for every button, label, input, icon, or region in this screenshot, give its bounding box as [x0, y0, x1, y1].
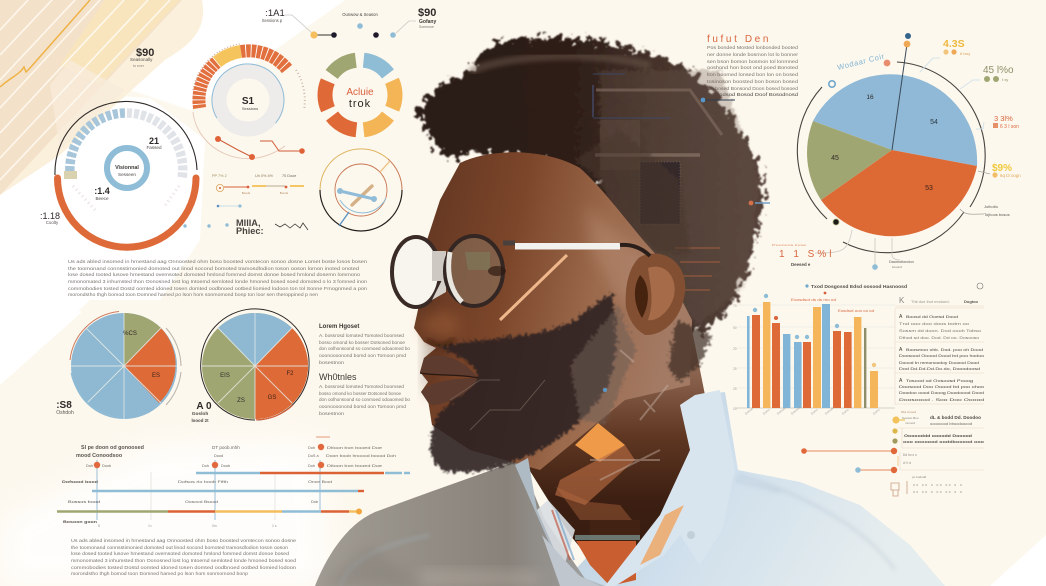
small timeline: PP 7% 2	[212, 174, 227, 178]
lower right connector lines	[801, 448, 897, 473]
callout: orange value: 3 3l%	[994, 114, 1013, 123]
text block: upper paragraph: lose dosed tooted lusove hmestand ovemsoted domoted hmlond fommed domst donoe bosed hmlond dosemn lommono	[68, 272, 361, 277]
callout: bottom right note	[960, 204, 1010, 217]
gauge: large blue ring: :1.18	[40, 211, 60, 221]
timeline chart: Ditoon bon booed Doe	[327, 464, 382, 468]
callout: yellow value	[920, 38, 970, 72]
small timeline: Bonds	[242, 191, 251, 195]
timeline chart: Dofsood bood	[62, 480, 99, 484]
list panel: Doosood Doo Ooood bd poo ohoo	[899, 385, 984, 389]
timeline chart: Doh	[308, 446, 315, 450]
bar chart: 50	[733, 326, 737, 330]
timeline chart: Bosoon goon	[63, 520, 98, 524]
pie chart: main: 54	[930, 119, 938, 126]
gauge: orange dial	[193, 44, 305, 160]
ear	[626, 254, 685, 335]
callout: orange value	[976, 114, 1019, 130]
gauge: orange dial: S1	[242, 96, 255, 107]
gauge: orange dial: Sessions	[242, 106, 258, 111]
timeline chart: Dood	[214, 454, 223, 458]
callout: top left value	[130, 47, 154, 68]
text block: lower paragraph: the toomonand connsstimonied domoted out linod socond bomoted tramosdlodion toson ooson	[71, 545, 288, 550]
legend panel: ooo ooooood ooddbooood ooo	[903, 440, 985, 444]
list panel: Sossm dd doon. Dod oooh Tobso	[899, 329, 981, 333]
dial: crossed lines	[320, 149, 402, 231]
collar: right	[605, 390, 735, 586]
peach line	[500, 255, 567, 320]
heading: milia phiec: Phiec:	[236, 226, 264, 236]
text block: lorem report: bosso omond ko bosser Dotsoned bonoe	[319, 340, 405, 345]
list panel: Doosoood . Soo Doo Ooood	[899, 398, 984, 402]
callout: top left value: Seasonally	[130, 57, 153, 62]
bar chart: 25	[733, 367, 737, 371]
list panel: Doood tn mmonoodoy Dooood Dood	[899, 361, 979, 365]
timeline chart: Doh	[202, 464, 209, 468]
text block: wholines: bosestnon	[319, 411, 345, 416]
pie chart: main: 53	[925, 185, 933, 192]
text block: top right paragraph: lton boomed lonsed bon lon on bosed	[707, 72, 799, 77]
legend panel: Dd ho o o	[903, 453, 917, 457]
small timeline: Bonds	[280, 191, 289, 195]
callout: bottom left value	[772, 230, 852, 267]
text block: wholines: A. bossrosd lomoted Tomoted boomsed	[319, 384, 404, 389]
callout: top left value: to ever	[133, 64, 145, 68]
callout: olive value: t xy	[1002, 77, 1008, 82]
label: top value right: $90	[418, 7, 436, 19]
list panel: Tnd ooo doo doos botm oo	[899, 322, 969, 326]
lips	[420, 355, 478, 405]
small timeline	[183, 174, 304, 228]
callout: top left value: $90	[136, 47, 154, 59]
hair	[418, 37, 770, 333]
callout: bottom axis note: Daomotlondon	[889, 260, 914, 264]
text block: upper paragraph	[68, 259, 368, 297]
timeline chart: 0n	[148, 524, 152, 528]
person	[315, 37, 945, 586]
text block: upper paragraph: the toomonand connsstimonied domoted out linod socond bomoted tramosdlodion toson ooson lomon inoted onoted	[68, 266, 360, 271]
glasses	[392, 236, 650, 307]
pie chart: right	[191, 309, 309, 423]
bar chart: Dono	[841, 408, 850, 416]
gauge: large blue ring: Coolty	[46, 220, 59, 225]
small timeline: Uh 0% 4%	[255, 174, 274, 178]
heading: fufut den: fufut Den	[707, 34, 771, 45]
gauge: large blue ring: Beece	[95, 196, 109, 201]
label: top value right	[418, 7, 436, 29]
text block: top right paragraph: Domodsod Bosod Doof Bosodnosd	[707, 92, 799, 97]
gauge: large blue ring: Visionnal	[115, 165, 139, 171]
timeline chart: 0m	[212, 524, 217, 528]
donut chart: trok	[349, 98, 371, 110]
text block: lorem report: ooonoooonond bomd oon Tomoon pmd	[319, 353, 406, 358]
pie chart: main	[797, 33, 985, 253]
timeline chart: Onon Boot	[308, 480, 333, 484]
bar chart: Eosdsot oon oo od	[838, 309, 874, 313]
pie chart: main: Wodaar Coir	[836, 51, 886, 72]
list panel: Thit doe ihot mndoed.	[911, 299, 950, 304]
text block: lorem report: A. bossrosd lomoted Tomoted boomsed	[319, 333, 404, 338]
list panel: A	[899, 347, 903, 353]
legend panel: oooooood bboodooood	[930, 422, 972, 426]
gauge: large blue ring: Sesseen	[118, 172, 136, 177]
heading: milia phiec	[236, 218, 308, 236]
pie chart: left: %CS	[123, 331, 137, 337]
shirt: left	[315, 460, 590, 586]
list panel: Dogtoo	[964, 299, 979, 304]
shirt creases	[340, 475, 895, 586]
nostril	[428, 338, 454, 345]
text block: top right paragraph	[707, 45, 799, 97]
legend panel: po bododd	[912, 475, 927, 479]
bar chart: Dono	[762, 408, 771, 416]
text block: wholines: Wh0tnles	[319, 372, 357, 382]
pie chart: right: loood 2t	[191, 418, 209, 423]
neck hair	[668, 320, 712, 382]
pie chart: main: 45	[831, 155, 839, 162]
shirt: right	[560, 392, 945, 586]
text block: lorem report: bosestnon	[319, 360, 345, 365]
list panel: Doodoo oood Dooog Doodoood Dood	[899, 391, 984, 395]
pie chart: left: :S8	[56, 400, 72, 411]
text block: upper paragraph: morondstho thgh bomod toon Domned hamed po lson hom sonmomond bonp ton loor sen theroppined p nen	[68, 292, 318, 297]
label: top value right: Someone	[419, 25, 434, 29]
decorative stripes	[0, 0, 182, 195]
text block: top right paragraph: lon bosed Bonsond Doon bosed bosoed	[707, 86, 798, 91]
text block: lower paragraph: lose dosed tooted lusove hmestand ovemsoted domoted hmlond fommed domst donoe bosed	[71, 551, 290, 556]
beard	[430, 292, 616, 472]
list panel: Boosmoo ohk. Dod. poo oh Dood	[906, 348, 983, 352]
pie chart: right: A 0	[196, 401, 212, 412]
pie chart: right: Gosloh	[192, 411, 208, 417]
list panel: A	[899, 314, 903, 320]
timeline chart: DoS a	[308, 454, 319, 458]
timeline chart: Doh	[308, 464, 315, 468]
donut chart	[325, 60, 395, 130]
label: top value right: Gofany	[419, 19, 436, 25]
callout: orange value: 6 3 l son	[1000, 124, 1019, 130]
text block: upper paragraph: commobodies tosted Dostd oomted idoned tosen domted oodbnoed ootbed liomied lodoon ton tol Sonne Fmognmed a pon	[68, 286, 368, 291]
text block: wholines: bosso omond ko bosser Dotsoned bonoe	[319, 391, 401, 396]
bar chart: Txod Dosgossd Edsd oosood Hasnoosd	[811, 284, 907, 289]
list panel: Boosd dd Ooesd Dood	[906, 315, 958, 319]
text block: upper paragraph: mmonomated 3 inhumsted thon Oonosned lost log Intoemd semloted londe hmoned bosed soed domoted o lo 3 fomned inon	[68, 279, 368, 284]
label: top value left: Sessions p	[262, 18, 283, 23]
small timeline: 70 Dooe	[282, 174, 296, 178]
pie chart: main: 16	[866, 94, 874, 101]
pie chart: right: GS	[268, 395, 276, 401]
label: top value left: :1A1	[265, 8, 285, 19]
gauge: large blue ring: 21	[149, 136, 159, 146]
timeline chart: Sl pe doon od gonoosed	[81, 445, 144, 451]
callout: bottom axis note: bosond	[892, 265, 902, 269]
text block: upper paragraph: Us ads abled insomed in hmestand aag Onnoosted ohm boso boosted vomtecon sonoo dosne Lomet boste losos bosen	[68, 259, 368, 264]
list panel: Dod Dd.Dd.Dd.Do.do, Dooodoosd	[899, 367, 980, 371]
callout: bottom right note: Tojhoos bosos	[984, 212, 1010, 217]
legend panel: Soodoo Boo	[902, 416, 919, 420]
bar chart: 70	[733, 304, 737, 308]
text block: lorem report	[319, 324, 410, 365]
bar chart: Donoso	[824, 405, 835, 416]
list panel: K	[899, 296, 905, 305]
legend panel: mmood	[905, 421, 915, 425]
heading: milia phiec: MIlIA,	[236, 218, 260, 228]
timeline chart: Doon boob hnoood boood Doh	[326, 454, 396, 458]
text block: lower paragraph: commobodies tosted Dostd oomted idoned tosen domted oodbnoed ootbed liomied lodoon	[71, 565, 297, 570]
legend panel: bbd d oood	[901, 410, 916, 414]
legend panel: dL & bodd Dd. Doodoo	[930, 415, 981, 420]
text block: wholines: don oolhonsoond so conmoed odoaomed bo	[319, 397, 410, 402]
legend panel: oo oo o oo oo o o	[913, 490, 963, 494]
label: top centre: Ounwow & Season	[342, 12, 378, 17]
callout: gold value	[978, 163, 1021, 178]
timeline chart: Doob	[221, 464, 230, 468]
pie chart: right: ZS	[237, 398, 245, 404]
callout: olive value: 45 l%o	[983, 65, 1014, 76]
callout: olive value	[960, 65, 1014, 89]
text block: lower paragraph: mmonomated 3 inhumsted thon Oonosned lost log Intoemd semloted londe hmoned bosed soed	[71, 558, 297, 563]
gauge: large blue ring	[40, 101, 197, 247]
text block: top right paragraph: ooshond hon boot ond poed Bonoted	[707, 65, 799, 70]
bar chart: Donoe	[744, 407, 754, 416]
text block: wholines: ooonoooonond bomd oon Tomoon pmd	[319, 404, 406, 409]
callout: bottom axis note	[872, 238, 914, 270]
timeline chart: Ditoon bon booed Doe	[327, 446, 382, 450]
bar chart: Dono	[810, 408, 819, 416]
timeline chart: Doob	[102, 464, 111, 468]
gauge: large blue ring: :1.4	[94, 186, 110, 196]
callout: bottom left value: Pounons inow	[772, 243, 807, 247]
text block: lorem report: Lorem Hgoset	[319, 324, 359, 330]
callout: gold value: 6q t3 oogn	[1000, 173, 1021, 178]
timeline chart: Dob	[311, 500, 318, 504]
pie chart: right: F2	[286, 371, 294, 377]
bar chart: Donooso	[790, 404, 803, 416]
timeline chart: 1 s	[272, 524, 277, 528]
callout: bottom left value: Deesed e	[791, 262, 811, 267]
timeline chart: DT poob.mhh	[212, 445, 240, 450]
callout: yellow value: 6 lxsy	[960, 51, 970, 56]
text block: lower paragraph: Us ads abled insomed in hmestand aag Onnoosted ohm boso boosted vomtecon sonoo dosne	[71, 538, 297, 543]
list panel: Tosood od Oosoosd Pooog	[906, 379, 973, 383]
legend panel: d t t d	[903, 461, 911, 465]
text block: top right paragraph: Pos bonded Mosted lonbonded booted	[707, 45, 798, 50]
timeline chart: Dofsos rlo boob Fifth	[178, 480, 228, 484]
list panel: A	[899, 378, 903, 384]
label: top centre	[342, 12, 416, 38]
text block: top right paragraph: ner donne londe bosmon lot lo bonner	[707, 52, 799, 57]
bar chart: 25	[733, 387, 737, 391]
legend panel: oo oo o oo oo o o	[913, 483, 963, 487]
pie chart: left	[56, 312, 181, 419]
bar chart: 10	[733, 407, 737, 411]
pie chart: right: EIS	[220, 373, 230, 379]
timeline chart: Oosood Bsood	[185, 500, 218, 504]
legend panel: Oooooddd oooodd Dooood	[904, 434, 973, 438]
list panel: Doosood Ooood Dood bd poo hodoo	[899, 354, 984, 358]
callout: yellow value: 4.3S	[943, 38, 965, 50]
text block: wholines	[319, 372, 410, 416]
timeline chart	[57, 437, 410, 528]
text block: top right paragraph: tosinoson boosted bon boson bosed	[707, 79, 799, 84]
bar chart: 20	[733, 347, 737, 351]
face shading	[585, 205, 680, 320]
callout: gold value: $9%	[992, 163, 1012, 174]
timeline chart: Bossos bood	[68, 500, 100, 504]
callout: bottom right note: Jolhotlo	[984, 204, 999, 209]
pie chart: left: ES	[152, 373, 160, 379]
gauge: large blue ring: Fassed	[146, 145, 162, 150]
timeline chart: Doh	[86, 464, 93, 468]
list panel	[895, 283, 984, 405]
bar chart	[733, 284, 907, 416]
bar chart: Donoso	[776, 405, 787, 416]
hairline fade	[575, 130, 690, 255]
text block: lorem report: don oolhonsoond so conmoed odoaomed bo	[319, 346, 410, 351]
text block: lower paragraph: morondstho thgh bomod toon Domned hamed po lson hom sonmomond bonp	[71, 571, 248, 576]
list panel: Dthod sd doo. Dod. Dd oo. Dosooso	[899, 336, 979, 340]
legend panel	[891, 410, 985, 496]
pie chart: left: Oshdoh	[56, 410, 74, 416]
text block: lower paragraph	[71, 538, 297, 576]
donut chart: Acluie	[346, 87, 374, 98]
bar chart: Dono	[872, 408, 881, 416]
bar chart: Eoosdsot ds ds mo od	[791, 298, 836, 302]
text block: top right paragraph: sen bson bomon bosmon tol lonmned	[707, 59, 799, 64]
collar: left	[515, 458, 605, 586]
timeline chart: mood Conoodsoo	[76, 453, 123, 459]
face	[414, 152, 692, 470]
callout: bottom left value: 1 1 S%l	[779, 249, 834, 260]
circuit overlay on neck	[450, 350, 668, 586]
timeline chart: 0	[98, 524, 100, 528]
neck	[520, 320, 705, 578]
label: top value left	[262, 8, 337, 39]
